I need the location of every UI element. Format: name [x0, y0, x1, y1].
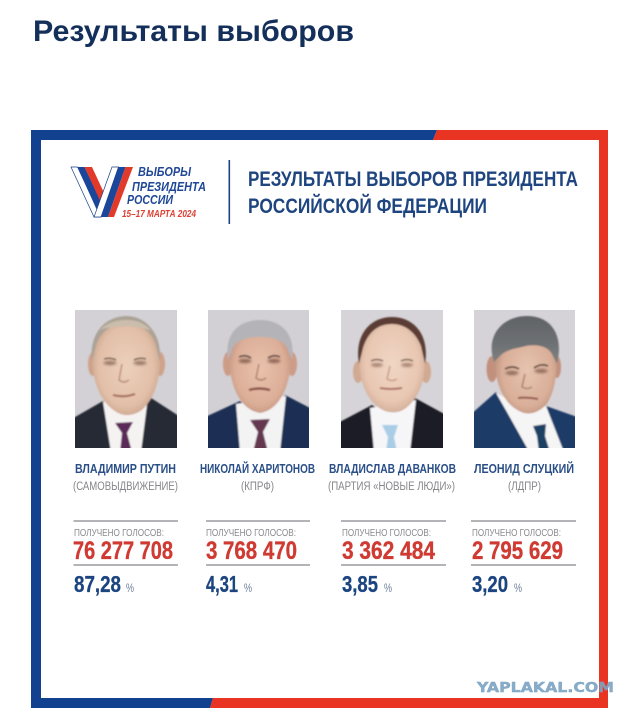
candidate 1: Путин: ПОЛУЧЕНО ГОЛОСОВ: — [74, 528, 164, 539]
logo text: ВЫБОРЫ — [138, 165, 191, 179]
candidate 4: Слуцкий: 3,20 — [472, 571, 508, 597]
candidate 2: Харитонов: % — [244, 581, 252, 595]
portrait: Даванков — [341, 310, 443, 448]
candidate 4: Слуцкий: ЛЕОНИД СЛУЦКИЙ — [474, 461, 574, 476]
candidate 1: Путин: (САМОВЫДВИЖЕНИЕ) — [73, 481, 178, 493]
candidate 3: Даванков: % — [384, 581, 392, 595]
candidate 2: Харитонов: 4,31 — [206, 571, 238, 597]
portrait: Путин — [75, 310, 177, 448]
candidate 2: Харитонов — [200, 461, 315, 597]
logo text: РОССИИ — [127, 193, 174, 207]
portrait: Харитонов — [208, 310, 309, 448]
candidate 1: Путин — [73, 462, 178, 597]
candidate 3: Даванков: 3,85 — [342, 571, 378, 597]
logo text: ПРЕЗИДЕНТА — [132, 180, 206, 194]
logo text — [122, 165, 206, 220]
page title: Результаты выборов — [33, 15, 354, 48]
candidate 4: Слуцкий: 2 795 629 — [472, 537, 563, 565]
icon: tricolour V — [71, 167, 133, 217]
header title: РОССИЙСКОЙ ФЕДЕРАЦИИ — [248, 194, 487, 218]
candidate 3: Даванков: 3 362 484 — [342, 537, 435, 565]
candidate 3: Даванков — [328, 462, 456, 597]
candidate 3: Даванков: ВЛАДИСЛАВ ДАВАНКОВ — [329, 462, 456, 476]
candidate 4: Слуцкий — [471, 461, 576, 597]
header divider — [228, 160, 230, 224]
candidate 4: Слуцкий: % — [514, 581, 522, 595]
logo text: 15–17 МАРТА 2024 — [122, 209, 196, 220]
tricolour frame — [31, 130, 608, 708]
candidate 2: Харитонов: 3 768 470 — [206, 537, 297, 565]
watermark: YAPLAKAL.COM — [476, 680, 614, 696]
candidate 2: Харитонов: ПОЛУЧЕНО ГОЛОСОВ: — [206, 528, 296, 539]
candidate 4: Слуцкий: ПОЛУЧЕНО ГОЛОСОВ: — [472, 528, 561, 539]
candidate 2: Харитонов: (КПРФ) — [241, 481, 274, 493]
portrait: Слуцкий — [474, 310, 575, 448]
candidate 4: Слуцкий: (ЛДПР) — [508, 481, 541, 493]
election logo — [71, 165, 206, 220]
candidate 2: Харитонов: НИКОЛАЙ ХАРИТОНОВ — [200, 461, 315, 476]
candidate 1: Путин: 76 277 708 — [73, 537, 173, 565]
candidate 1: Путин: 87,28 — [74, 571, 121, 597]
candidate 3: Даванков: (ПАРТИЯ «НОВЫЕ ЛЮДИ») — [328, 481, 455, 493]
candidate 1: Путин: % — [126, 581, 134, 595]
candidate 3: Даванков: ПОЛУЧЕНО ГОЛОСОВ: — [342, 528, 431, 539]
header title — [248, 168, 578, 218]
candidate 1: Путин: ВЛАДИМИР ПУТИН — [75, 462, 176, 476]
